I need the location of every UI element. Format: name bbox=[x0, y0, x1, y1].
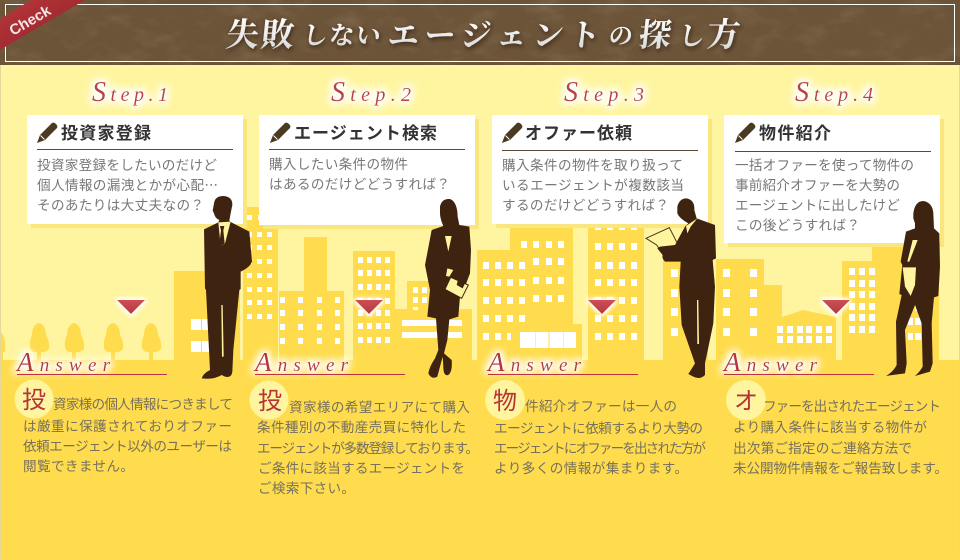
answer label 4: A nswer bbox=[722, 347, 818, 377]
answer text 3 bbox=[485, 380, 706, 476]
answer text 1: 依頼エージェント以外のユーザーは bbox=[23, 439, 232, 454]
heading: 物件紹介 bbox=[759, 124, 831, 143]
silhouette: man standing bbox=[202, 196, 252, 379]
answer text 3: 物 bbox=[493, 388, 517, 415]
answer text 2: エージェントが多数登録しております。 bbox=[257, 441, 479, 456]
heading: 投資家登録 bbox=[61, 123, 151, 143]
answer text 2: 条件種別の不動産売買に特化した bbox=[257, 419, 466, 435]
step 3 label: S tep.3 bbox=[564, 77, 644, 108]
answer text 1: 閲覧できません。 bbox=[23, 459, 134, 474]
card: step 1 bbox=[27, 115, 247, 228]
answer text 1: は厳重に保護されておりオファー bbox=[23, 419, 232, 434]
title bbox=[224, 17, 742, 54]
answer text 4: 出次第ご指定のご連絡方法で bbox=[733, 440, 912, 456]
card: step 4 bbox=[724, 115, 944, 247]
answer text 3: より多くの情報が集まります。 bbox=[494, 461, 688, 476]
answer text 3: エージェントにオファーを出された方が bbox=[494, 441, 706, 456]
question text: 購入条件の物件を取り扱って bbox=[502, 157, 683, 173]
question text bbox=[735, 157, 914, 233]
check ribbon bbox=[0, 0, 85, 50]
question text: 事前紹介オファーを大勢の bbox=[735, 177, 900, 193]
answer text 3: エージェントに依頼するより大勢の bbox=[494, 421, 703, 436]
question text: 個人情報の漏洩とかが心配… bbox=[37, 174, 218, 194]
arrow: step 4 bbox=[822, 300, 850, 314]
answer text 2: 投 bbox=[258, 388, 282, 415]
question text: いるエージェントが複数該当 bbox=[502, 177, 684, 193]
icon: pencil bbox=[37, 123, 57, 143]
answer text 1 bbox=[14, 380, 233, 474]
title: 失敗 bbox=[224, 17, 296, 54]
title: 探 bbox=[637, 17, 673, 53]
card: step 3 bbox=[492, 115, 712, 228]
ground bbox=[0, 360, 960, 560]
question text: この後どうすれば？ bbox=[735, 218, 860, 233]
step 2 label: S tep.2 bbox=[331, 77, 411, 108]
title: エージェント bbox=[386, 18, 602, 53]
question text: そのあたりは大丈夫なの？ bbox=[37, 198, 204, 213]
answer label 3: A nswer bbox=[486, 347, 582, 377]
card: step 2 bbox=[259, 115, 479, 229]
icon: pencil bbox=[270, 123, 290, 143]
question text: はあるのだけどどうすれば？ bbox=[269, 177, 450, 192]
answer text 3: 件紹介オファーは一人の bbox=[525, 399, 677, 414]
silhouette: man reading document bbox=[646, 198, 716, 378]
city skyline bbox=[174, 207, 939, 361]
answer text 2: ご検索下さい。 bbox=[258, 481, 355, 496]
answer text 4: オ bbox=[734, 388, 758, 415]
title: しない bbox=[301, 23, 382, 50]
heading: オファー依頼 bbox=[525, 124, 632, 143]
header banner bbox=[0, 0, 960, 65]
answer text 4: ファーを出されたエージェント bbox=[763, 399, 941, 414]
title: の bbox=[607, 24, 634, 50]
question text: するのだけどどうすれば？ bbox=[502, 198, 669, 213]
arrow: step 1 bbox=[117, 300, 145, 314]
answer label 1: A nswer bbox=[15, 347, 111, 377]
question text: 購入したい条件の物件 bbox=[269, 156, 408, 172]
question text: 一括オファーを使って物件の bbox=[735, 157, 914, 173]
arrow: step 3 bbox=[588, 300, 616, 314]
step 1 label: Step.1 bbox=[92, 77, 168, 108]
icon: pencil bbox=[502, 123, 522, 143]
title: 方 bbox=[705, 17, 742, 54]
silhouette: woman with folder bbox=[425, 199, 471, 378]
heading: エージェント検索 bbox=[294, 124, 437, 143]
answer text 4: 未公開物件情報をご報告致します。 bbox=[733, 461, 948, 476]
answer label 2: A nswer bbox=[253, 347, 349, 377]
answer text 1: 資家様の個人情報につきまして bbox=[53, 397, 233, 412]
answer text 2: ご条件に該当するエージェントを bbox=[258, 460, 465, 476]
silhouette: woman standing bbox=[886, 201, 940, 376]
question text bbox=[269, 156, 450, 192]
icon: pencil bbox=[735, 123, 755, 143]
answer text 2 bbox=[250, 380, 479, 496]
question text bbox=[502, 157, 684, 213]
answer text 1: 投 bbox=[22, 387, 46, 414]
question text bbox=[37, 158, 218, 213]
answer text 4 bbox=[726, 380, 948, 476]
arrow: step 2 bbox=[355, 300, 383, 314]
question text: 投資家登録をしたいのだけど bbox=[37, 158, 217, 173]
step 4 label: Step.4 bbox=[795, 77, 873, 108]
title: し bbox=[677, 22, 706, 51]
trees bbox=[0, 323, 161, 360]
answer text 4: より購入条件に該当する物件が bbox=[733, 419, 927, 435]
question text: エージェントに出したけど bbox=[735, 198, 900, 213]
check ribbon: Check bbox=[7, 2, 55, 39]
answer text 2: 資家様の希望エリアにて購入 bbox=[289, 400, 470, 415]
